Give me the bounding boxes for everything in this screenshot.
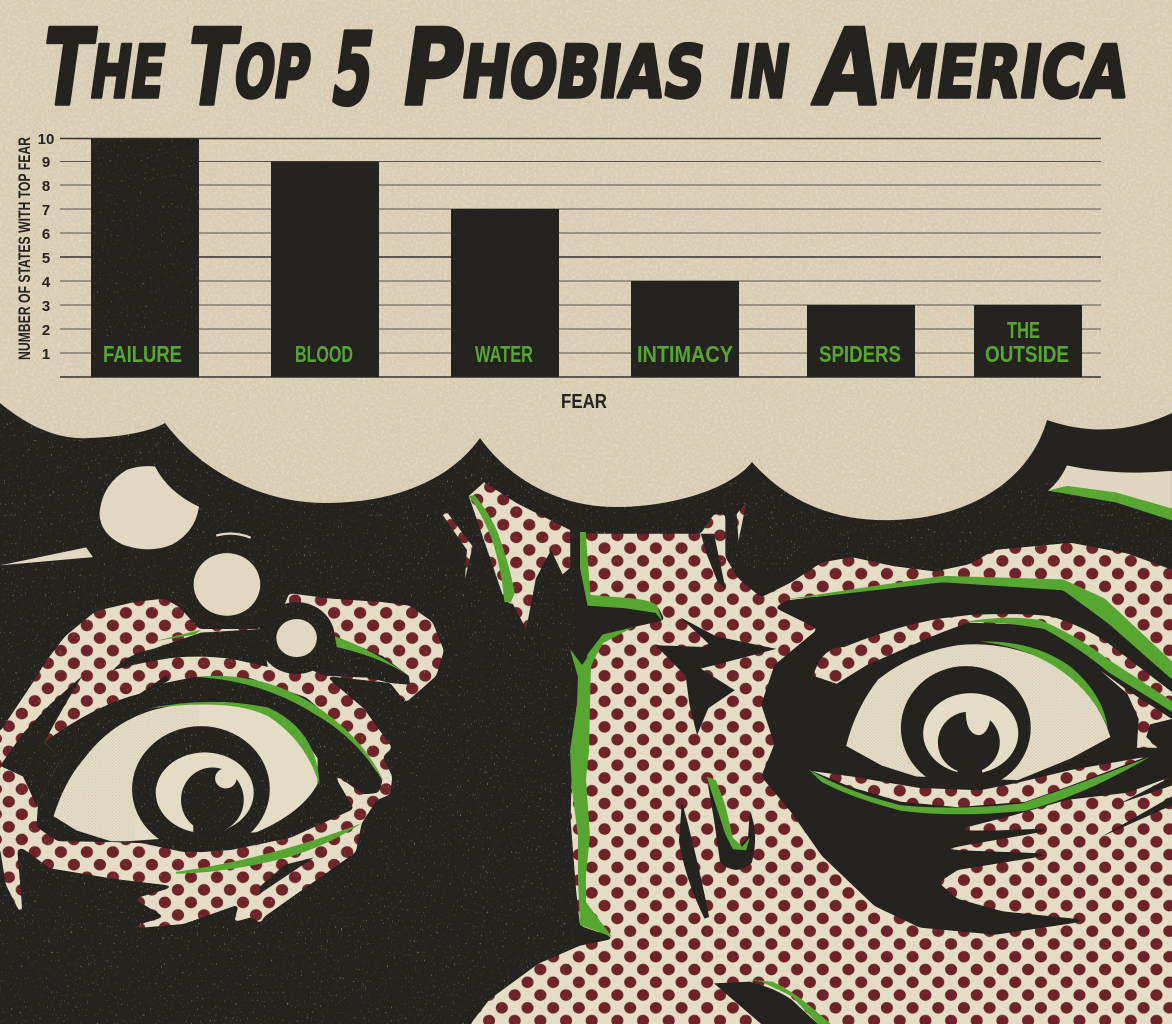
green: bridge outline xyxy=(469,495,515,602)
right eye xyxy=(580,532,1172,1024)
brow stroke xyxy=(113,629,268,670)
left lash streak xyxy=(0,676,82,805)
bar: the outside: OUTSIDE xyxy=(985,341,1069,367)
x axis title: FEAR xyxy=(561,391,607,413)
thought bubble medium xyxy=(194,553,260,616)
iris inner xyxy=(923,693,1018,774)
halftone between brow and lid xyxy=(813,614,1172,705)
face: upper bridge halftone patch xyxy=(442,482,570,629)
halftone below lower rim xyxy=(812,757,1146,807)
title: OP xyxy=(229,31,316,115)
nostril xyxy=(706,777,755,870)
pupil xyxy=(181,768,244,832)
iris inner xyxy=(156,752,254,833)
bar: intimacy: INTIMACY xyxy=(637,341,733,367)
title: P xyxy=(395,6,489,129)
small under brow stroke xyxy=(140,675,169,694)
black eye surround xyxy=(36,677,383,852)
y axis numbers: 2 xyxy=(42,322,50,339)
y axis numbers: 6 xyxy=(42,226,50,243)
iris ring xyxy=(132,726,270,852)
ink speckle texture xyxy=(0,400,1172,1024)
green highlight: hairline xyxy=(1048,486,1172,520)
thought bubble large xyxy=(100,466,199,549)
y axis numbers: 5 xyxy=(42,250,50,267)
halftone at outer corner xyxy=(1100,670,1172,748)
top right cream patch xyxy=(1048,465,1172,510)
eye white xyxy=(846,644,1110,780)
green: brow highlight xyxy=(784,576,1172,683)
y axis numbers: 3 xyxy=(42,298,50,315)
y axis numbers: 8 xyxy=(42,178,50,195)
green: brow right xyxy=(335,636,409,676)
bar: blood: BLOOD xyxy=(295,341,353,367)
grid lines xyxy=(60,162,1101,353)
right lashes xyxy=(1101,777,1172,837)
thought cloud xyxy=(0,0,1172,520)
pupil stem xyxy=(958,768,982,778)
black eye surround xyxy=(761,582,1172,935)
title xyxy=(35,6,1137,129)
green: upper bridge shadow xyxy=(580,532,662,621)
title: IN xyxy=(725,31,795,115)
bar: failure: FAILURE xyxy=(103,341,182,367)
y axis numbers: 9 xyxy=(42,154,50,171)
pupil highlight xyxy=(966,708,991,735)
bar: water xyxy=(451,209,559,377)
green: lid highlight xyxy=(965,618,1172,712)
thought bubble small xyxy=(276,619,317,657)
green: brow left xyxy=(153,630,201,642)
green: inner lid shadow xyxy=(980,642,1108,728)
bar: intimacy xyxy=(631,281,739,377)
black star at brow base xyxy=(656,617,776,735)
pupil highlight xyxy=(215,768,237,788)
pupil stem xyxy=(193,825,224,836)
green: inner lid shadow xyxy=(147,702,320,786)
bar: water: WATER xyxy=(475,341,533,367)
bar: failure xyxy=(91,138,199,377)
bar chart xyxy=(15,131,1101,413)
pupil xyxy=(938,712,1000,773)
wedge highlight xyxy=(0,547,93,565)
black strokes beside brow xyxy=(701,534,725,588)
green: nostril highlight xyxy=(706,777,750,850)
face: sliver beside brow xyxy=(737,503,746,541)
bar: blood xyxy=(271,162,379,377)
green: lower lid xyxy=(176,823,362,874)
bar: the outside: THE xyxy=(1007,317,1040,343)
nose line xyxy=(679,802,709,919)
eye fine dots xyxy=(846,644,1110,780)
brow stroke right xyxy=(291,636,410,685)
green: bridge inner line xyxy=(580,627,633,690)
paper grain texture xyxy=(0,0,1172,520)
y axis numbers: 4 xyxy=(42,274,51,291)
green: lower lid xyxy=(808,757,1150,814)
lower eye rim xyxy=(846,744,1139,791)
bubble ring xyxy=(258,602,335,674)
green highlight: nose bridge edge xyxy=(570,640,612,937)
title: T xyxy=(180,6,269,129)
halftone skin around left eye xyxy=(0,594,444,928)
eye white xyxy=(54,702,318,841)
face: small sliver xyxy=(442,513,473,579)
y axis title: NUMBER OF STATES WITH TOP FEAR xyxy=(15,137,34,360)
bar: the outside xyxy=(974,305,1082,377)
bar: spiders: SPIDERS xyxy=(819,341,901,367)
y axis numbers: 10 xyxy=(38,131,54,148)
y axis numbers: 1 xyxy=(42,346,50,363)
eye fine dots xyxy=(54,703,199,841)
mouth hint xyxy=(714,982,818,1024)
left eye xyxy=(0,466,444,928)
title: 5 xyxy=(325,11,381,128)
title: HOBIAS xyxy=(457,31,711,115)
title: A xyxy=(808,6,906,129)
face: right side halftone skin xyxy=(471,465,1172,1024)
lash under the eye xyxy=(260,857,314,893)
bar: spiders xyxy=(807,305,915,377)
arc highlight xyxy=(216,534,251,538)
green: mouth highlight xyxy=(746,980,831,1024)
iris ring xyxy=(901,666,1031,790)
green: lid highlight xyxy=(195,676,384,782)
y axis numbers: 7 xyxy=(42,202,50,219)
title: HE xyxy=(85,31,171,115)
y axis numbers xyxy=(38,131,54,363)
title: T xyxy=(35,6,124,129)
